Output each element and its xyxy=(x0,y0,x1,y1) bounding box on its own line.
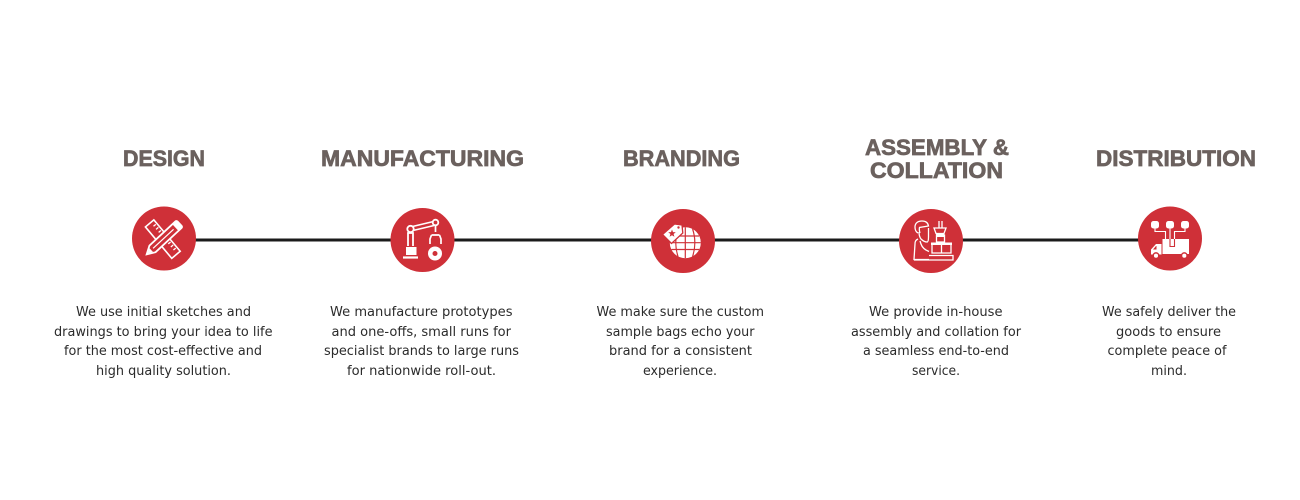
description: distribution: mind. xyxy=(1151,364,1187,379)
heading: design: DESIGN xyxy=(123,146,205,171)
description: branding: experience. xyxy=(643,364,717,379)
heading: manufacturing: MANUFACTURING xyxy=(321,146,524,171)
icon: delivery truck with parcels xyxy=(1138,206,1202,270)
timeline connector line xyxy=(190,238,1150,242)
step: design xyxy=(54,146,272,379)
description: distribution: goods to ensure xyxy=(1116,325,1221,340)
description: manufacturing: for nationwide roll-out. xyxy=(347,364,496,379)
step: branding xyxy=(596,146,764,379)
step: manufacturing xyxy=(321,146,524,379)
step: assembly and collation xyxy=(851,135,1022,379)
description: branding: We make sure the custom xyxy=(596,305,764,320)
description: assembly and collation: We provide in-house xyxy=(869,305,1002,320)
icon: robot arm xyxy=(390,208,454,272)
description: design: for the most cost-effective and xyxy=(64,344,262,359)
description: design xyxy=(54,305,272,379)
description: distribution: We safely deliver the xyxy=(1102,305,1236,320)
description: assembly and collation: service. xyxy=(912,364,960,379)
heading: distribution: DISTRIBUTION xyxy=(1096,146,1256,171)
description: design: high quality solution. xyxy=(96,364,231,379)
description: manufacturing: We manufacture prototypes xyxy=(330,305,513,320)
description: design: drawings to bring your idea to life xyxy=(54,325,272,340)
description: manufacturing: specialist brands to large runs xyxy=(324,344,519,359)
description: distribution xyxy=(1102,305,1236,379)
heading: branding: BRANDING xyxy=(623,146,740,171)
heading: assembly and collation xyxy=(865,135,1009,183)
description: manufacturing xyxy=(324,305,519,379)
description: manufacturing: and one-offs, small runs for xyxy=(332,325,512,340)
step: distribution xyxy=(1096,146,1256,379)
description: branding: sample bags echo your xyxy=(606,325,755,340)
description: design: We use initial sketches and xyxy=(76,305,251,320)
icon: globe with price tag xyxy=(651,209,715,273)
heading: assembly and collation: ASSEMBLY & xyxy=(865,135,1009,160)
description: assembly and collation xyxy=(851,305,1022,379)
description: branding xyxy=(596,305,764,379)
description: assembly and collation: a seamless end-to-end xyxy=(863,344,1009,359)
description: branding: brand for a consistent xyxy=(609,344,752,359)
description: distribution: complete peace of xyxy=(1108,344,1227,359)
heading: assembly and collation: COLLATION xyxy=(870,158,1003,183)
icon: ruler and pencil xyxy=(132,206,196,270)
icon: worker with boxes xyxy=(899,209,963,273)
description: assembly and collation: assembly and collation for xyxy=(851,325,1022,340)
